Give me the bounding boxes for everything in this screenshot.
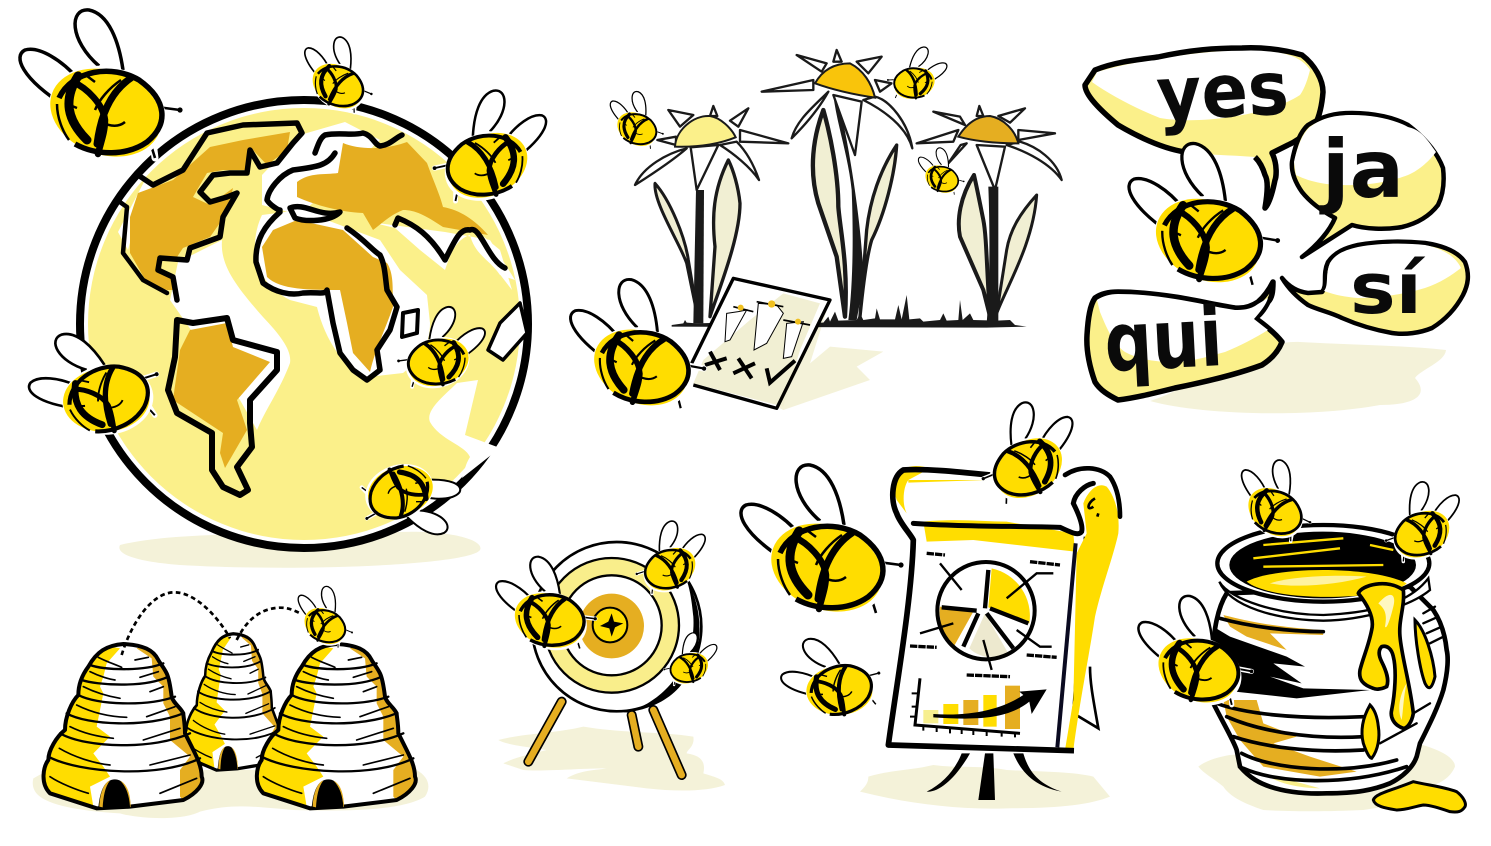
bee in speech bubbles xyxy=(1125,141,1283,302)
word: si: sí xyxy=(1350,248,1426,330)
bee at target top xyxy=(628,516,715,604)
bee at target lower right xyxy=(660,631,720,692)
flowers xyxy=(635,50,1062,410)
sheet outline xyxy=(888,470,1074,751)
bee on top of chart xyxy=(965,392,1091,519)
pie chart xyxy=(910,553,1060,677)
flip chart xyxy=(860,466,1120,809)
globe disc xyxy=(80,100,528,548)
beehives xyxy=(33,592,428,818)
target legs xyxy=(528,702,682,775)
bee on globe left xyxy=(14,304,179,471)
bee on pot right xyxy=(1374,475,1471,573)
shadow: honey pot xyxy=(1198,743,1455,811)
stems xyxy=(693,95,998,323)
word: ja: ja xyxy=(1319,123,1404,216)
bee large left of chart xyxy=(741,465,904,631)
bubble: si xyxy=(1282,242,1468,334)
hive right xyxy=(257,644,416,808)
bar chart xyxy=(910,678,1047,737)
continent: South America xyxy=(173,323,270,468)
pot body xyxy=(1212,587,1448,794)
white Atlantic region xyxy=(170,240,290,430)
bee beside pot xyxy=(1134,593,1257,719)
hive back xyxy=(183,634,283,770)
pot ridges xyxy=(1217,607,1443,781)
dark shading xyxy=(1212,627,1370,698)
white north Atlantic xyxy=(118,122,515,290)
bee on globe top xyxy=(291,29,385,124)
word: yes: yes xyxy=(1154,45,1291,138)
bubble: qui xyxy=(1087,282,1282,400)
continent: North America xyxy=(130,132,290,290)
yellow scroll xyxy=(1065,485,1119,750)
leaves xyxy=(655,110,1037,320)
target xyxy=(498,542,725,791)
continent: Africa xyxy=(262,220,393,372)
bubble: ja xyxy=(1292,113,1444,257)
shadow: target xyxy=(498,727,725,791)
bee on globe right xyxy=(426,86,553,215)
bubble: yes xyxy=(1085,45,1323,208)
coastlines xyxy=(117,123,527,495)
flower heads xyxy=(675,116,736,147)
bee with paper xyxy=(565,276,711,424)
petals xyxy=(635,50,1062,190)
speech bubbles xyxy=(1085,45,1468,400)
bee over hive xyxy=(287,580,363,657)
bee on globe middle xyxy=(397,307,485,396)
shadow: speech bubbles xyxy=(1150,342,1446,413)
bee right of flower xyxy=(913,145,969,201)
bee small left of chart xyxy=(771,619,894,743)
honey puddle xyxy=(1373,782,1465,812)
word: qui: qui xyxy=(1102,290,1225,391)
bullseye star xyxy=(600,613,623,637)
shadow: flip chart xyxy=(860,765,1110,809)
flip paper back xyxy=(1073,537,1098,728)
ground with grass xyxy=(672,295,1027,328)
white south-east ocean xyxy=(429,380,500,478)
growth arrow xyxy=(933,689,1047,719)
pot rim xyxy=(1217,525,1429,602)
shadow: hives xyxy=(33,770,428,818)
easel legs xyxy=(927,753,1062,800)
honey pot xyxy=(1198,525,1465,812)
globe xyxy=(80,100,528,548)
flight paths xyxy=(122,592,300,655)
target rings xyxy=(532,542,701,711)
bee on pot left xyxy=(1224,450,1327,554)
bee at target left xyxy=(496,557,597,659)
bee above centre flower xyxy=(885,44,948,109)
white around Africa xyxy=(255,210,430,377)
pot lip front xyxy=(1219,578,1430,621)
honey drips xyxy=(1358,584,1413,728)
gold shading xyxy=(1223,700,1357,777)
hive left xyxy=(44,644,202,808)
continent: Eurasia xyxy=(297,142,488,235)
bee on globe top left xyxy=(20,10,183,176)
ocean xyxy=(88,108,520,540)
bee on globe bottom xyxy=(343,432,476,566)
shadow: globe xyxy=(119,532,480,568)
shadow: paper xyxy=(750,300,883,410)
paper with sketches xyxy=(692,278,830,408)
bee by flowers left xyxy=(602,87,671,157)
